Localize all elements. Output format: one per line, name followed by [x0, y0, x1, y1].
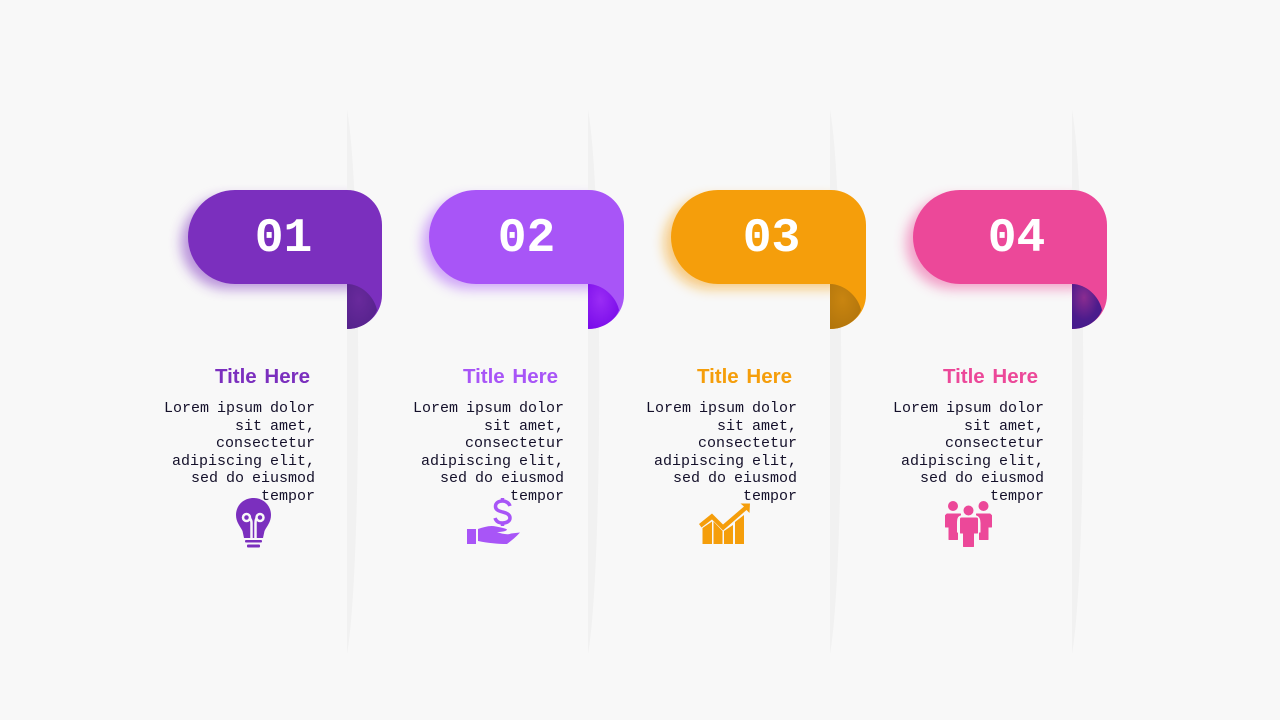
banner 3	[671, 190, 866, 329]
icon: rising chart	[699, 504, 750, 544]
title 3: Title Here	[697, 365, 792, 388]
number 03: 03	[743, 212, 800, 266]
vertical strip 1	[347, 110, 358, 654]
body text 3: Lorem ipsum dolor sit amet, consectetur adipiscing elit, sed do eiusmod tempor	[646, 400, 797, 505]
icon: group of people	[946, 502, 992, 546]
icon: hand with dollar	[467, 498, 520, 544]
column 3 graphics	[656, 188, 866, 544]
title 4: Title Here	[943, 365, 1038, 388]
column 1 graphics	[174, 188, 382, 548]
banner shadow 3	[664, 197, 874, 289]
banner 2	[429, 190, 624, 329]
banner shadow 2	[422, 197, 632, 289]
fold 2	[588, 284, 619, 329]
number 04: 04	[988, 212, 1045, 266]
banner shadow 4	[906, 197, 1116, 289]
title 2: Title Here	[463, 365, 558, 388]
body text 2: Lorem ipsum dolor sit amet, consectetur adipiscing elit, sed do eiusmod tempor	[413, 400, 564, 505]
title 1: Title Here	[215, 365, 310, 388]
banner 4	[913, 190, 1107, 329]
body text 4: Lorem ipsum dolor sit amet, consectetur adipiscing elit, sed do eiusmod tempor	[893, 400, 1044, 505]
column 4 graphics	[899, 189, 1107, 547]
fold 1	[347, 284, 377, 329]
graphics layer	[174, 188, 1107, 548]
vertical strip 2	[588, 110, 599, 654]
number 01: 01	[255, 212, 312, 266]
vertical strip 3	[830, 110, 841, 654]
banner shadow 1	[181, 197, 391, 289]
vertical strip 4	[1072, 110, 1083, 654]
banner 1	[188, 190, 382, 329]
fold 3	[830, 284, 861, 329]
fold 4	[1072, 284, 1102, 329]
icon: light bulb	[236, 498, 271, 548]
body text 1: Lorem ipsum dolor sit amet, consectetur adipiscing elit, sed do eiusmod tempor	[164, 400, 315, 505]
number 02: 02	[498, 212, 555, 266]
column 2 graphics	[415, 190, 624, 544]
